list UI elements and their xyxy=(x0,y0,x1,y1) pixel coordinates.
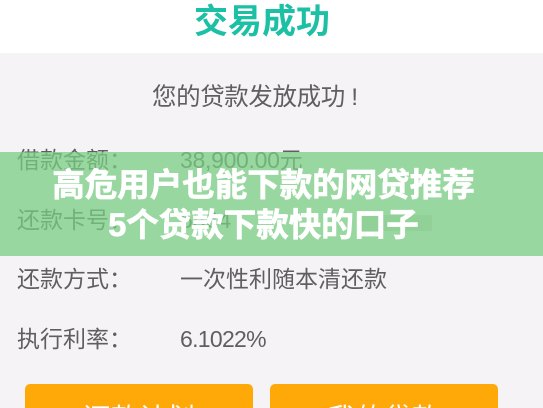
row: repayment method xyxy=(17,266,387,292)
value: 一次性利随本清还款 xyxy=(180,266,387,292)
heading: transaction success: 交易成功 xyxy=(194,3,330,41)
label: 执行利率： xyxy=(17,326,132,352)
label: 借款金额： xyxy=(17,147,132,173)
value: 38,900.00元 xyxy=(180,147,302,173)
title line 2: 5个贷款下款快的口子 xyxy=(108,207,419,243)
masked number xyxy=(362,215,432,231)
value: 5564 xyxy=(180,207,231,233)
header bar xyxy=(0,0,543,53)
button: repayment plan xyxy=(25,384,253,408)
label: 还款方式： xyxy=(17,266,132,292)
title line 1: 高危用户也能下款的网贷推荐 xyxy=(52,167,475,203)
label: 还款卡号： xyxy=(17,207,132,233)
title banner xyxy=(0,152,543,256)
row: loan amount xyxy=(17,147,302,173)
row: repayment card xyxy=(17,207,231,233)
button: my loans xyxy=(270,384,498,408)
row: interest rate xyxy=(17,326,266,352)
subheading: 您的贷款发放成功 ! xyxy=(152,84,358,111)
value: 6.1022% xyxy=(180,326,266,352)
